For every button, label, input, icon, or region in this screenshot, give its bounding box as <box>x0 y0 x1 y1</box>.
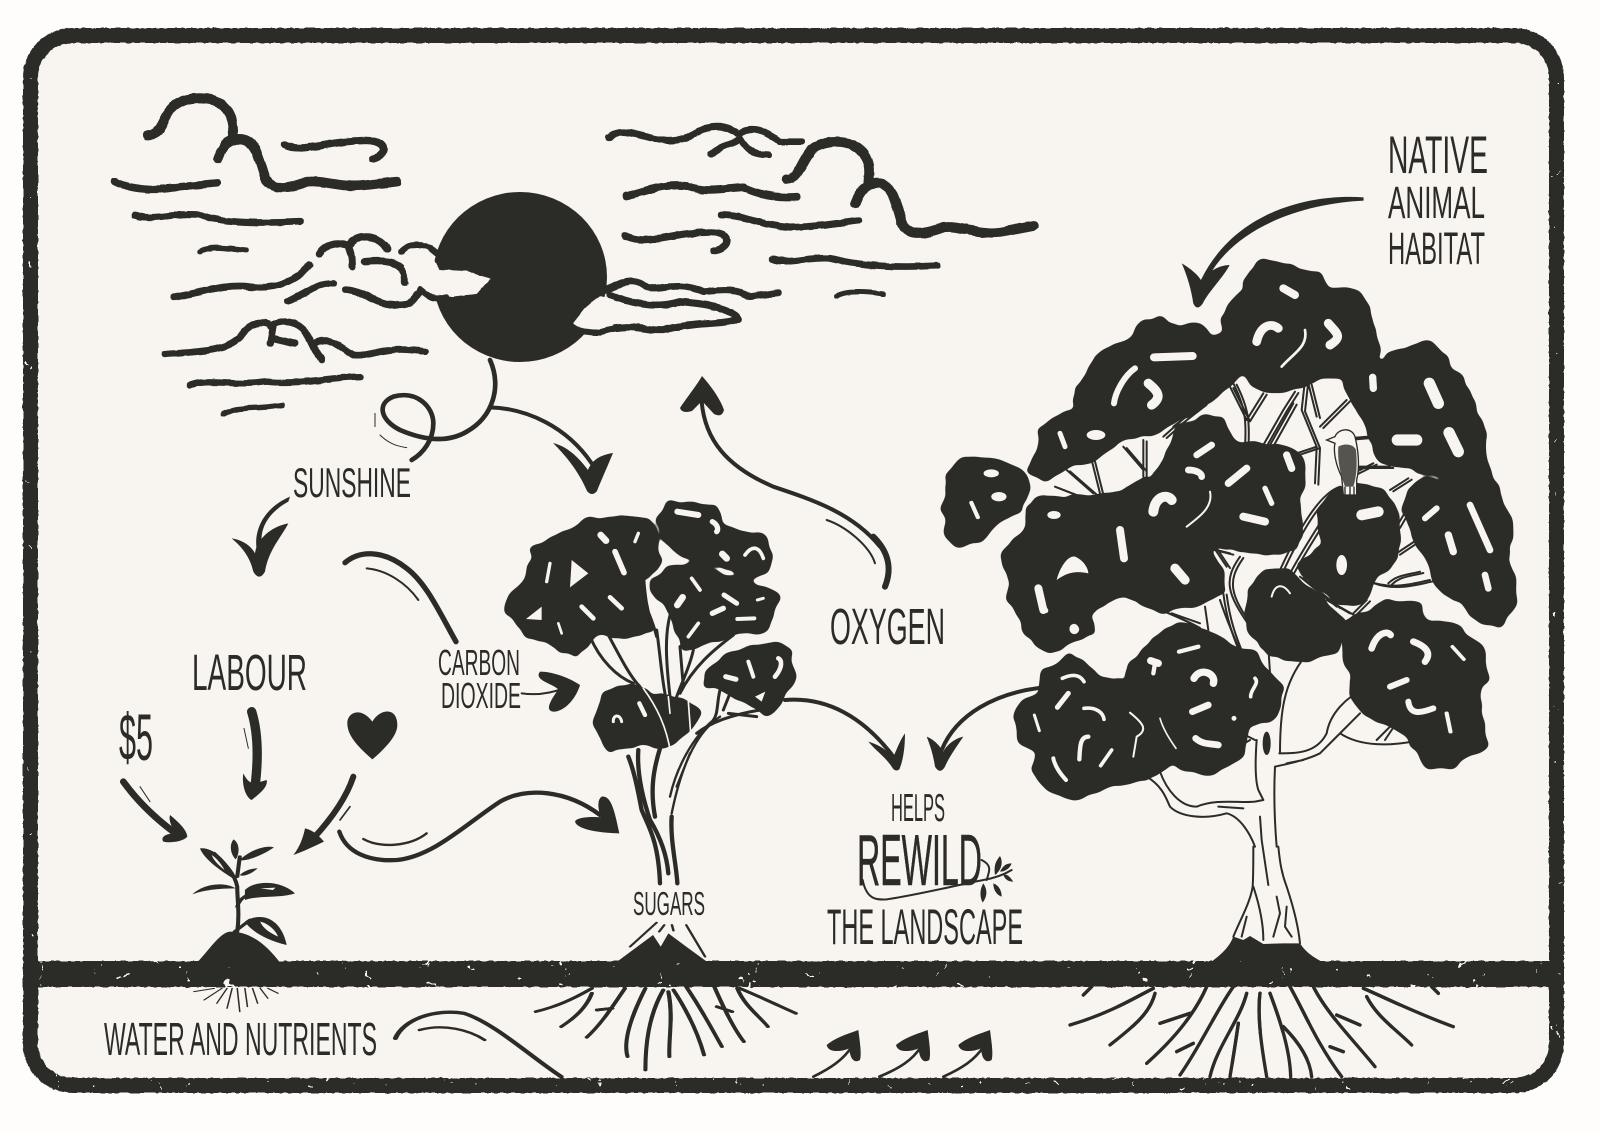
arrow: sun spiral to sunshine and to young tree <box>375 360 613 494</box>
label: labour: LABOUR <box>192 644 307 701</box>
seedling leaves <box>192 839 295 945</box>
label: helps rewild the landscape: REWILD <box>857 821 982 901</box>
arrow: carbon dioxide arc <box>345 554 456 642</box>
label: carbon dioxide: CARBON <box>438 642 520 683</box>
rising arrow two <box>879 1030 930 1077</box>
young tree branches <box>590 573 760 733</box>
young tree branch lines over crown <box>643 688 691 753</box>
seedling stem <box>214 853 260 932</box>
rising arrow three <box>943 1030 992 1077</box>
arrows: nutrients rising <box>813 1030 992 1077</box>
arrow: head of the wave <box>575 797 619 833</box>
highlights on the lower crowns <box>1034 600 1433 780</box>
arrows and icons: left flow <box>123 497 600 860</box>
arrow: young tree to rewild <box>785 700 905 771</box>
label: carbon dioxide <box>438 642 521 716</box>
big tree crowns: small left and lower right <box>945 459 1483 766</box>
young tree mound and roots <box>536 923 796 1070</box>
label: carbon dioxide: DIOXIDE <box>441 675 521 716</box>
label: helps rewild the landscape <box>827 787 1023 955</box>
label: helps rewild the landscape: HELPS <box>891 787 945 830</box>
big tree branches: upper <box>1055 380 1433 655</box>
highlights on the upper crowns <box>1038 288 1490 633</box>
text: THE LANDSCAPE <box>827 899 1023 955</box>
arrow: carbon dioxide to tree <box>522 672 580 712</box>
rising arrow one <box>813 1030 861 1077</box>
seedling <box>192 839 295 1012</box>
rewild underline and sprig <box>863 856 1013 903</box>
highlights on the small crown and right lobes <box>971 469 1464 732</box>
arrow: big tree to rewild <box>927 688 1039 771</box>
big tree mound <box>1212 936 1322 962</box>
big tree crowns: upper <box>1005 263 1513 650</box>
arrow: money to seedling <box>123 782 187 842</box>
icon: kookaburra <box>1327 430 1358 495</box>
arrow: wave from seedling to young tree <box>339 793 600 860</box>
label: oxygen: OXYGEN <box>830 598 945 655</box>
clouds: left group <box>115 98 490 414</box>
soil band <box>36 961 1551 987</box>
big tree roots <box>1070 987 1453 1077</box>
text: $5 <box>119 700 153 774</box>
young tree roots <box>536 987 796 1070</box>
young tree crowns <box>508 505 791 747</box>
arrow: labour to seedling <box>243 712 267 800</box>
young tree <box>508 505 791 883</box>
seedling rootlets <box>194 988 278 1012</box>
young tree leaf highlights <box>526 512 781 722</box>
label: sunshine: SUNSHINE <box>293 459 411 506</box>
arrows: towards rewild and head of the wave <box>575 688 1039 833</box>
label: sugars: SUGARS <box>633 885 705 922</box>
label: water and nutrients: WATER AND NUTRIENTS <box>104 1013 377 1065</box>
arrow: oxygen to sky <box>680 376 889 587</box>
big tree crowns: lower <box>1017 572 1343 798</box>
icon: heart <box>347 711 397 759</box>
label: native animal habitat: NATIVE <box>1388 126 1488 185</box>
label: native animal habitat <box>1388 126 1488 274</box>
sun and clouds <box>115 98 1033 414</box>
label: native animal habitat: ANIMAL <box>1388 177 1485 228</box>
arrow: water and nutrients to ground line <box>395 1012 561 1077</box>
big tree <box>945 263 1513 1077</box>
sun <box>433 192 607 362</box>
label: native animal habitat: HABITAT <box>1388 223 1485 274</box>
arrow: native animal habitat to tree <box>1182 197 1364 307</box>
seedling mound <box>196 932 281 963</box>
clouds: right group <box>570 127 1033 332</box>
big tree trunk and limbs <box>1147 600 1420 943</box>
arrow: heart to seedling <box>293 777 353 855</box>
young tree mound <box>615 923 709 963</box>
arrow: sunshine to labour <box>232 497 290 577</box>
